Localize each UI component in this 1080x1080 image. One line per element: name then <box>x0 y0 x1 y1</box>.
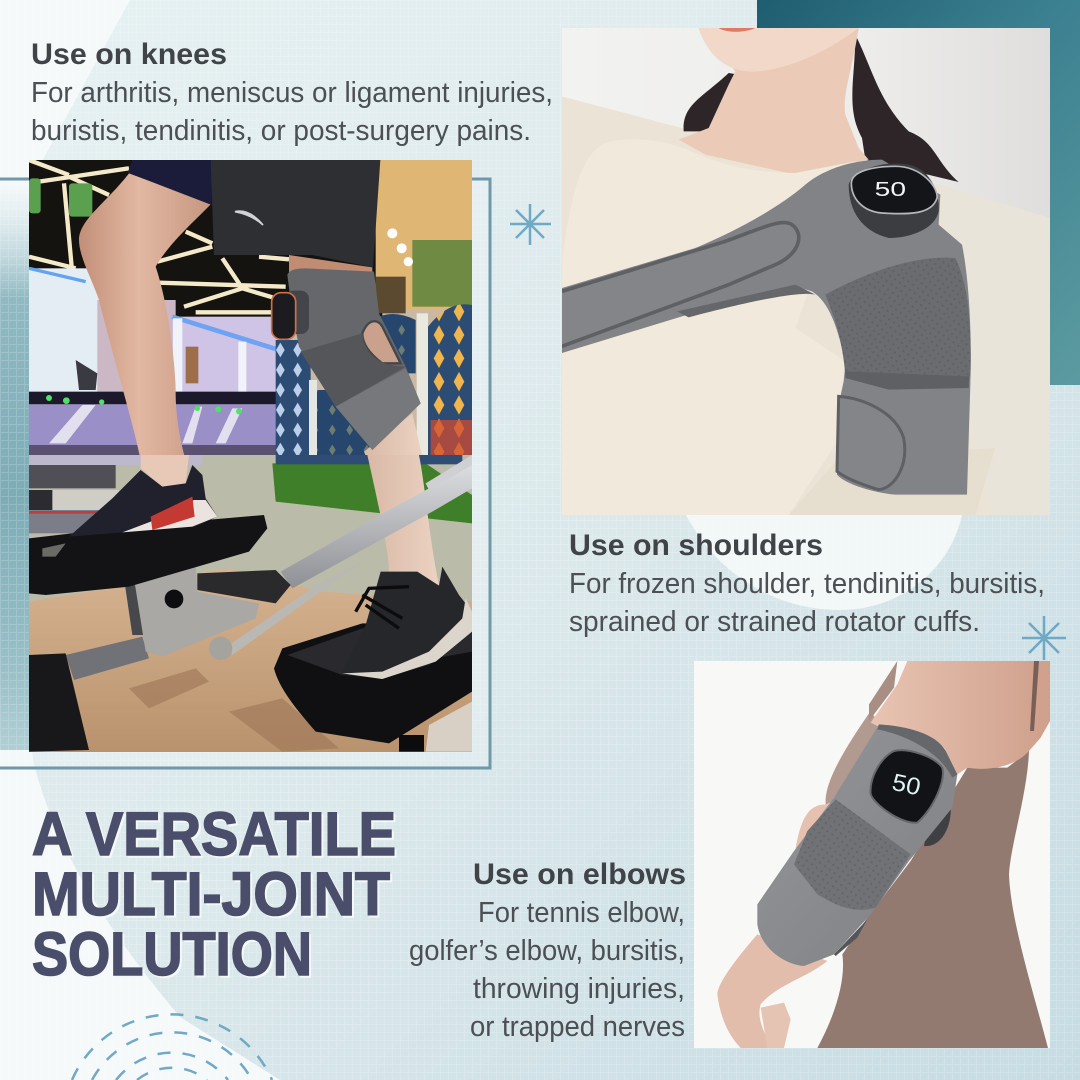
heading: use on shoulders <box>569 529 1045 638</box>
photo: elbow sleeve <box>694 661 1050 1048</box>
right pedal <box>274 623 472 743</box>
heading: use on elbows: golfer’s elbow, bursitis, <box>409 935 685 967</box>
shoulder controller <box>849 163 939 238</box>
shorts <box>128 160 212 205</box>
left shoe <box>69 465 217 537</box>
heading: use on knees: buristis, tendinitis, or post-surgery pains. <box>31 115 531 147</box>
legs <box>367 455 439 585</box>
floor <box>29 455 472 602</box>
pads behind sleeve <box>924 810 951 846</box>
torso <box>817 751 1048 1048</box>
left pedal <box>29 515 267 595</box>
treadmills <box>29 392 279 404</box>
heading: use on shoulders: Use on shoulders <box>569 529 823 562</box>
brace <box>562 160 971 495</box>
cushion right <box>942 185 955 190</box>
windows and wall <box>29 268 99 395</box>
title: MULTI-JOINT <box>32 860 390 928</box>
ceiling <box>29 160 382 327</box>
display: 50 <box>890 769 923 801</box>
title: SOLUTION <box>34 922 314 990</box>
pedal mechanism <box>197 570 291 603</box>
heading: use on knees <box>31 38 553 147</box>
base <box>29 653 89 752</box>
sofa <box>562 96 992 515</box>
heading: use on shoulders: For frozen shoulder, tendinitis, bursitis, <box>569 568 1045 600</box>
display <box>871 750 943 823</box>
title <box>32 800 398 990</box>
lower strap <box>837 396 905 490</box>
title: A VERSATILE <box>34 802 398 870</box>
knee controller <box>289 290 309 334</box>
icon: sparkle top <box>510 204 551 245</box>
knee brace <box>287 268 421 450</box>
arm and shoulder <box>871 661 1050 774</box>
neck and face <box>679 28 869 175</box>
right shoe <box>342 567 472 678</box>
near leg <box>79 173 212 460</box>
icon: sparkle right <box>1022 616 1066 660</box>
machines behind <box>29 455 202 465</box>
mesh panel <box>825 258 971 376</box>
dashed arcs <box>72 1014 272 1080</box>
sweater <box>788 162 856 175</box>
title: A VERSATILE <box>32 800 396 868</box>
heading: use on knees: Use on knees <box>31 38 227 71</box>
title: SOLUTION <box>32 920 312 988</box>
heading: use on elbows: Use on elbows <box>473 858 686 891</box>
rails <box>281 465 472 588</box>
heading: use on knees: For arthritis, meniscus or ligament injuries, <box>31 77 553 109</box>
hedge <box>272 463 472 523</box>
heading: use on elbows: or trapped nerves <box>470 1011 685 1043</box>
hand behind <box>796 802 830 848</box>
photo: knee brace in gym <box>29 160 472 755</box>
photo frame: knees <box>0 179 490 768</box>
heading: use on shoulders: sprained or strained rotator cuffs. <box>569 606 980 638</box>
sleeve <box>757 724 957 966</box>
forearm and fist <box>717 934 827 1048</box>
title: MULTI-JOINT <box>34 862 392 930</box>
photo: shoulder brace <box>562 28 1050 515</box>
hedge and lattice <box>412 240 472 307</box>
heading: use on elbows: For tennis elbow, <box>478 897 685 929</box>
shoulder controller: 50 <box>875 178 906 201</box>
heading: use on elbows <box>409 858 686 1043</box>
hair <box>684 35 959 182</box>
leg behind brace <box>289 255 372 272</box>
heading: use on elbows: throwing injuries, <box>473 973 685 1005</box>
